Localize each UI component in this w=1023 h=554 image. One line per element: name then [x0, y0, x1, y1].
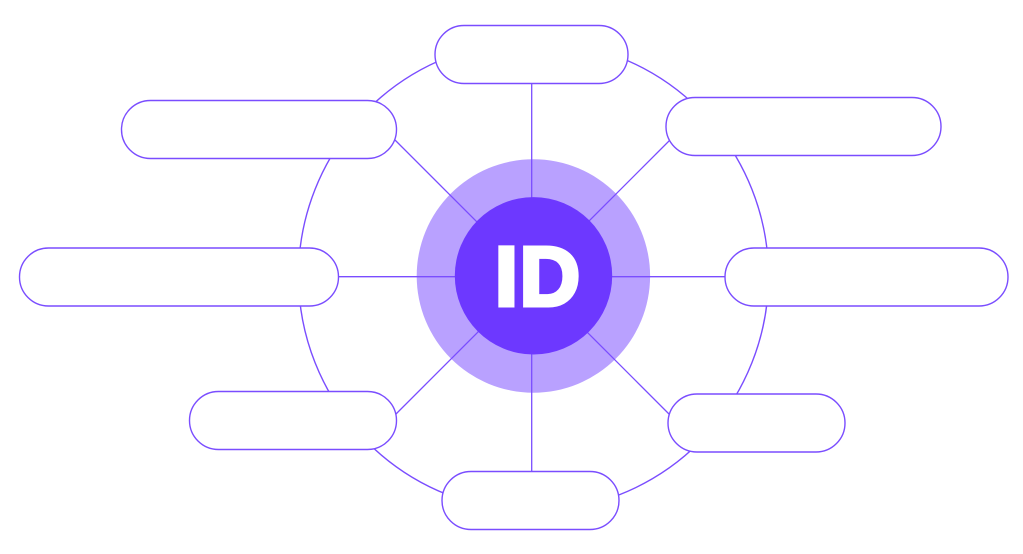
pill upper left — [122, 100, 396, 158]
pill middle right — [725, 248, 1008, 306]
spoke lines — [335, 80, 730, 474]
pill top — [435, 26, 628, 84]
halo circle — [417, 159, 650, 393]
center label: ID — [495, 229, 580, 323]
pill upper right — [666, 98, 941, 156]
pill lower right — [668, 394, 845, 452]
pill bottom — [442, 472, 619, 530]
outer ring — [298, 41, 768, 511]
pill middle left — [20, 248, 338, 306]
center circle — [455, 197, 612, 354]
pill lower left — [190, 392, 396, 450]
